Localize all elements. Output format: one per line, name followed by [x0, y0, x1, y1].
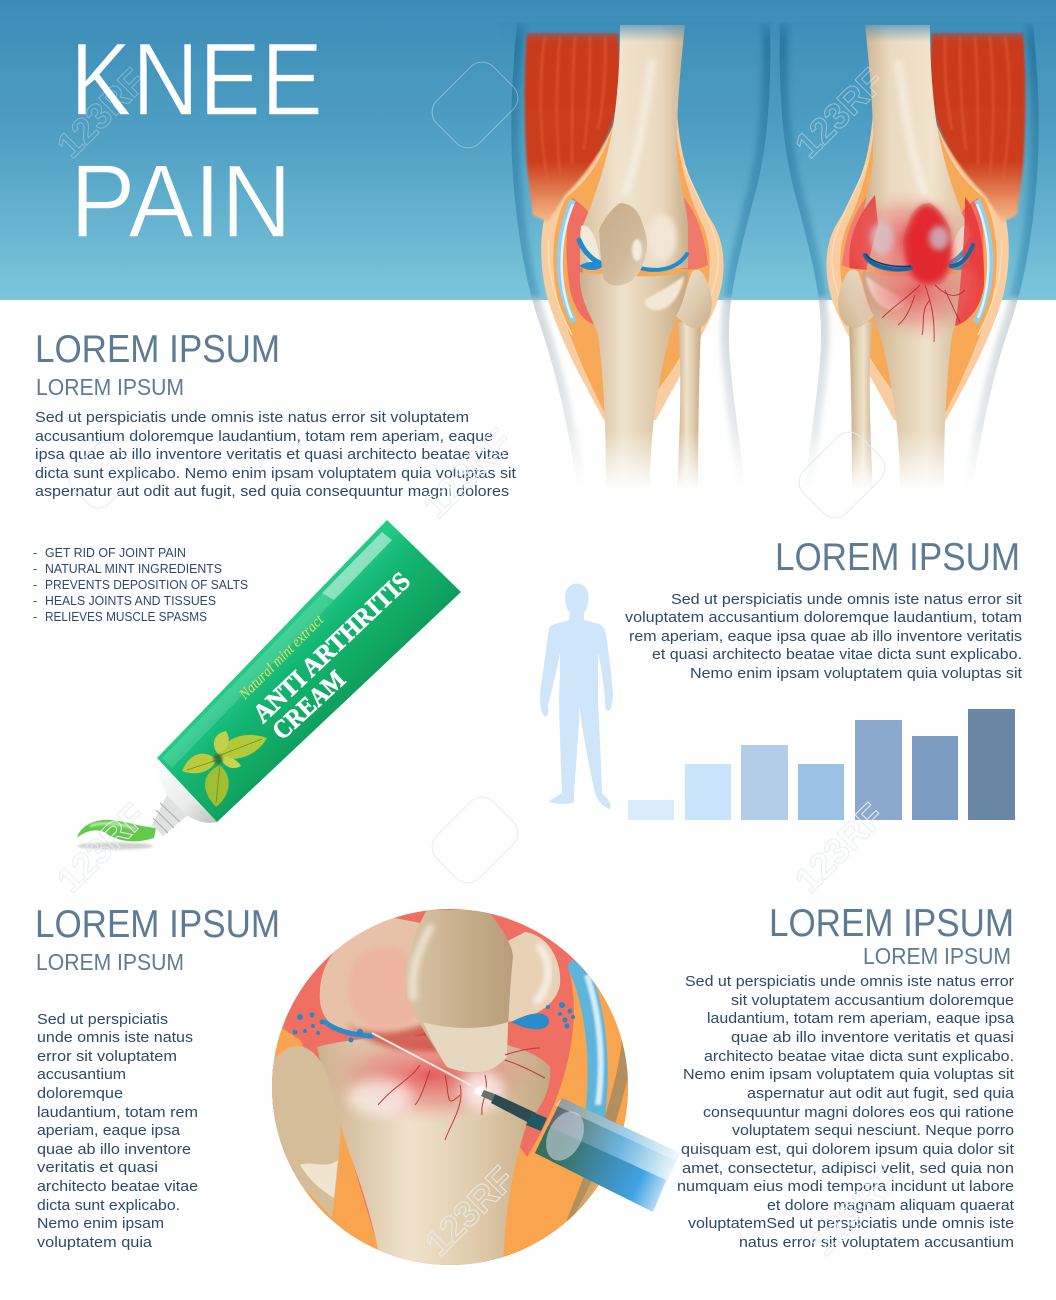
- paragraph: natus error sit voluptatem accusantium: [739, 1234, 1014, 1251]
- paragraph: rem aperiam, eaque ipsa quae ab illo inventore veritatis: [629, 628, 1022, 645]
- paragraph: et quasi architecto beatae vitae dicta sunt explicabo.: [652, 646, 1022, 663]
- paragraph: quisquam est, qui dolorem ipsum quia dolor sit: [681, 1141, 1015, 1158]
- tube script tagline: Natural mint extract: [236, 612, 328, 703]
- paragraph: numquam eius modi tempora incidunt ut labore: [677, 1178, 1014, 1195]
- paragraph: unde omnis iste natus: [37, 1029, 193, 1046]
- paragraph: aperiam, eaque ipsa: [37, 1122, 181, 1139]
- paragraph: error sit voluptatem: [37, 1048, 177, 1065]
- heading: LOREM IPSUM: [769, 902, 1014, 945]
- illustration: healthy knee: [511, 22, 770, 490]
- subheading: LOREM IPSUM: [36, 949, 184, 975]
- crystal deposits: [292, 1002, 575, 1042]
- paragraph: accusantium doloremque laudantium, totam rem aperiam, eaque: [35, 428, 493, 445]
- blue bursa band: [575, 960, 598, 1125]
- base tissue: [270, 905, 630, 1270]
- header background: [0, 0, 1056, 300]
- watermarks: 123RF: [49, 795, 154, 901]
- nozzle and shoulder: [152, 760, 217, 836]
- paragraph: accusantium: [37, 1066, 126, 1083]
- paragraph: dicta sunt explicabo. Nemo enim ipsam voluptatem quia voluptas sit: [35, 465, 517, 482]
- tibia: [317, 1036, 550, 1270]
- paragraph: ipsa quae ab illo inventore veritatis et quasi architecto beatae vitae: [35, 446, 509, 463]
- heading: LOREM IPSUM: [35, 328, 280, 371]
- paragraph: [37, 1011, 198, 1251]
- heading: LOREM IPSUM: [35, 903, 280, 946]
- benefits list: -: [33, 562, 37, 576]
- text block: bottom left: [35, 903, 280, 1251]
- title: KNEE: [70, 22, 323, 138]
- paragraph: dicta sunt explicabo.: [37, 1197, 180, 1214]
- paragraph: [677, 973, 1015, 1251]
- paragraph: voluptatem quia: [37, 1234, 153, 1251]
- paragraph: amet, consectetur, adipisci velit, sed quia non: [682, 1160, 1014, 1177]
- watermarks: 123RF: [49, 60, 154, 166]
- illustration: inflamed knee: [780, 22, 1039, 490]
- paragraph: Sed ut perspiciatis unde omnis iste natus error sit: [671, 591, 1023, 608]
- paragraph: veritatis et quasi: [37, 1159, 158, 1176]
- meniscus: [325, 1022, 372, 1036]
- needle and syringe: [372, 1033, 680, 1212]
- watermarks: 123RF: [787, 795, 892, 901]
- paragraph: voluptatem sequi nesciunt. Neque porro: [732, 1122, 1014, 1139]
- paragraph: Sed ut perspiciatis unde omnis iste natus error: [685, 973, 1014, 990]
- watermarks: 123RF: [415, 420, 520, 526]
- text block: top left: [35, 328, 517, 500]
- fibula: [270, 1046, 341, 1218]
- tube product name: ANTI ARTHRITIS: [247, 566, 416, 728]
- paragraph: Sed ut perspiciatis: [37, 1011, 168, 1028]
- blood vessels: [378, 1048, 545, 1140]
- text block: middle right: [625, 536, 1023, 682]
- subheading: LOREM IPSUM: [36, 374, 184, 400]
- fascia bands: [566, 1040, 628, 1222]
- benefits list: -: [33, 578, 37, 592]
- red tissue strip: [520, 964, 574, 1157]
- paragraph: et dolore magnam aliquam quaerat: [767, 1197, 1015, 1214]
- bar chart: [628, 709, 1015, 820]
- text block: bottom right: [677, 902, 1015, 1251]
- icon: human silhouette: [540, 583, 613, 809]
- paragraph: [625, 591, 1023, 682]
- benefits list: [33, 546, 248, 624]
- paragraph: architecto beatae vitae: [37, 1178, 198, 1195]
- paragraph: architecto beatae vitae dicta sunt explicabo.: [704, 1048, 1014, 1065]
- fade under knees: [500, 430, 1056, 490]
- paragraph: Nemo enim ipsam voluptatem quia voluptas sit: [683, 1066, 1015, 1083]
- mint leaves: [182, 731, 267, 807]
- paragraph: voluptatemSed ut perspiciatis unde omnis iste: [688, 1215, 1014, 1232]
- paragraph: doloremque: [37, 1085, 123, 1102]
- illustration: injection into knee: [270, 905, 680, 1270]
- benefits list: RELIEVES MUSCLE SPASMS: [45, 610, 207, 624]
- paragraph: Nemo enim ipsam voluptatem quia voluptas sit: [690, 665, 1023, 682]
- paragraph: quae ab illo inventore veritatis et quasi: [731, 1029, 1014, 1046]
- paragraph: sit voluptatem accusantium doloremque: [731, 992, 1014, 1009]
- paste: [77, 820, 156, 850]
- benefits list: PREVENTS DEPOSITION OF SALTS: [45, 578, 248, 592]
- paragraph: laudantium, totam rem: [37, 1104, 198, 1121]
- paragraph: aspernatur aut odit aut fugit, sed quia consequuntur magni dolores: [35, 483, 509, 500]
- orange fat: [496, 960, 628, 1259]
- femoral condyles: [320, 918, 424, 1038]
- benefits list: GET RID OF JOINT PAIN: [45, 546, 186, 560]
- watermarks: 123RF: [417, 1158, 522, 1264]
- benefits list: -: [33, 594, 37, 608]
- benefits list: -: [33, 610, 37, 624]
- tube body: [157, 520, 461, 822]
- paragraph: consequuntur magni dolores eos qui ratione: [703, 1104, 1014, 1121]
- paragraph: laudantium, totam rem aperiam, eaque ipsa: [707, 1010, 1015, 1027]
- paragraph: aspernatur aut odit aut fugit, sed quia: [747, 1085, 1015, 1102]
- paragraph: Nemo enim ipsam: [37, 1215, 164, 1232]
- title: [70, 22, 323, 260]
- tube product name: CREAM: [266, 665, 351, 745]
- paragraph: quae ab illo inventore: [37, 1141, 191, 1158]
- watermarks: 123RF: [802, 1158, 907, 1264]
- fade over top of knees: [500, 22, 1056, 42]
- watermarks: 123RF: [787, 60, 892, 166]
- patella: [405, 910, 513, 1072]
- benefits list: -: [33, 546, 37, 560]
- watermarks: [49, 56, 907, 1264]
- benefits list: HEALS JOINTS AND TISSUES: [45, 594, 216, 608]
- heading: LOREM IPSUM: [775, 536, 1020, 579]
- paragraph: [35, 409, 517, 500]
- illustration: cream tube: [77, 520, 461, 850]
- benefits list: NATURAL MINT INGREDIENTS: [45, 562, 222, 576]
- title: PAIN: [70, 144, 292, 260]
- paragraph: Sed ut perspiciatis unde omnis iste natus error sit voluptatem: [35, 409, 469, 426]
- subheading: LOREM IPSUM: [863, 943, 1011, 969]
- paragraph: voluptatem accusantium doloremque laudantium, totam: [625, 609, 1022, 626]
